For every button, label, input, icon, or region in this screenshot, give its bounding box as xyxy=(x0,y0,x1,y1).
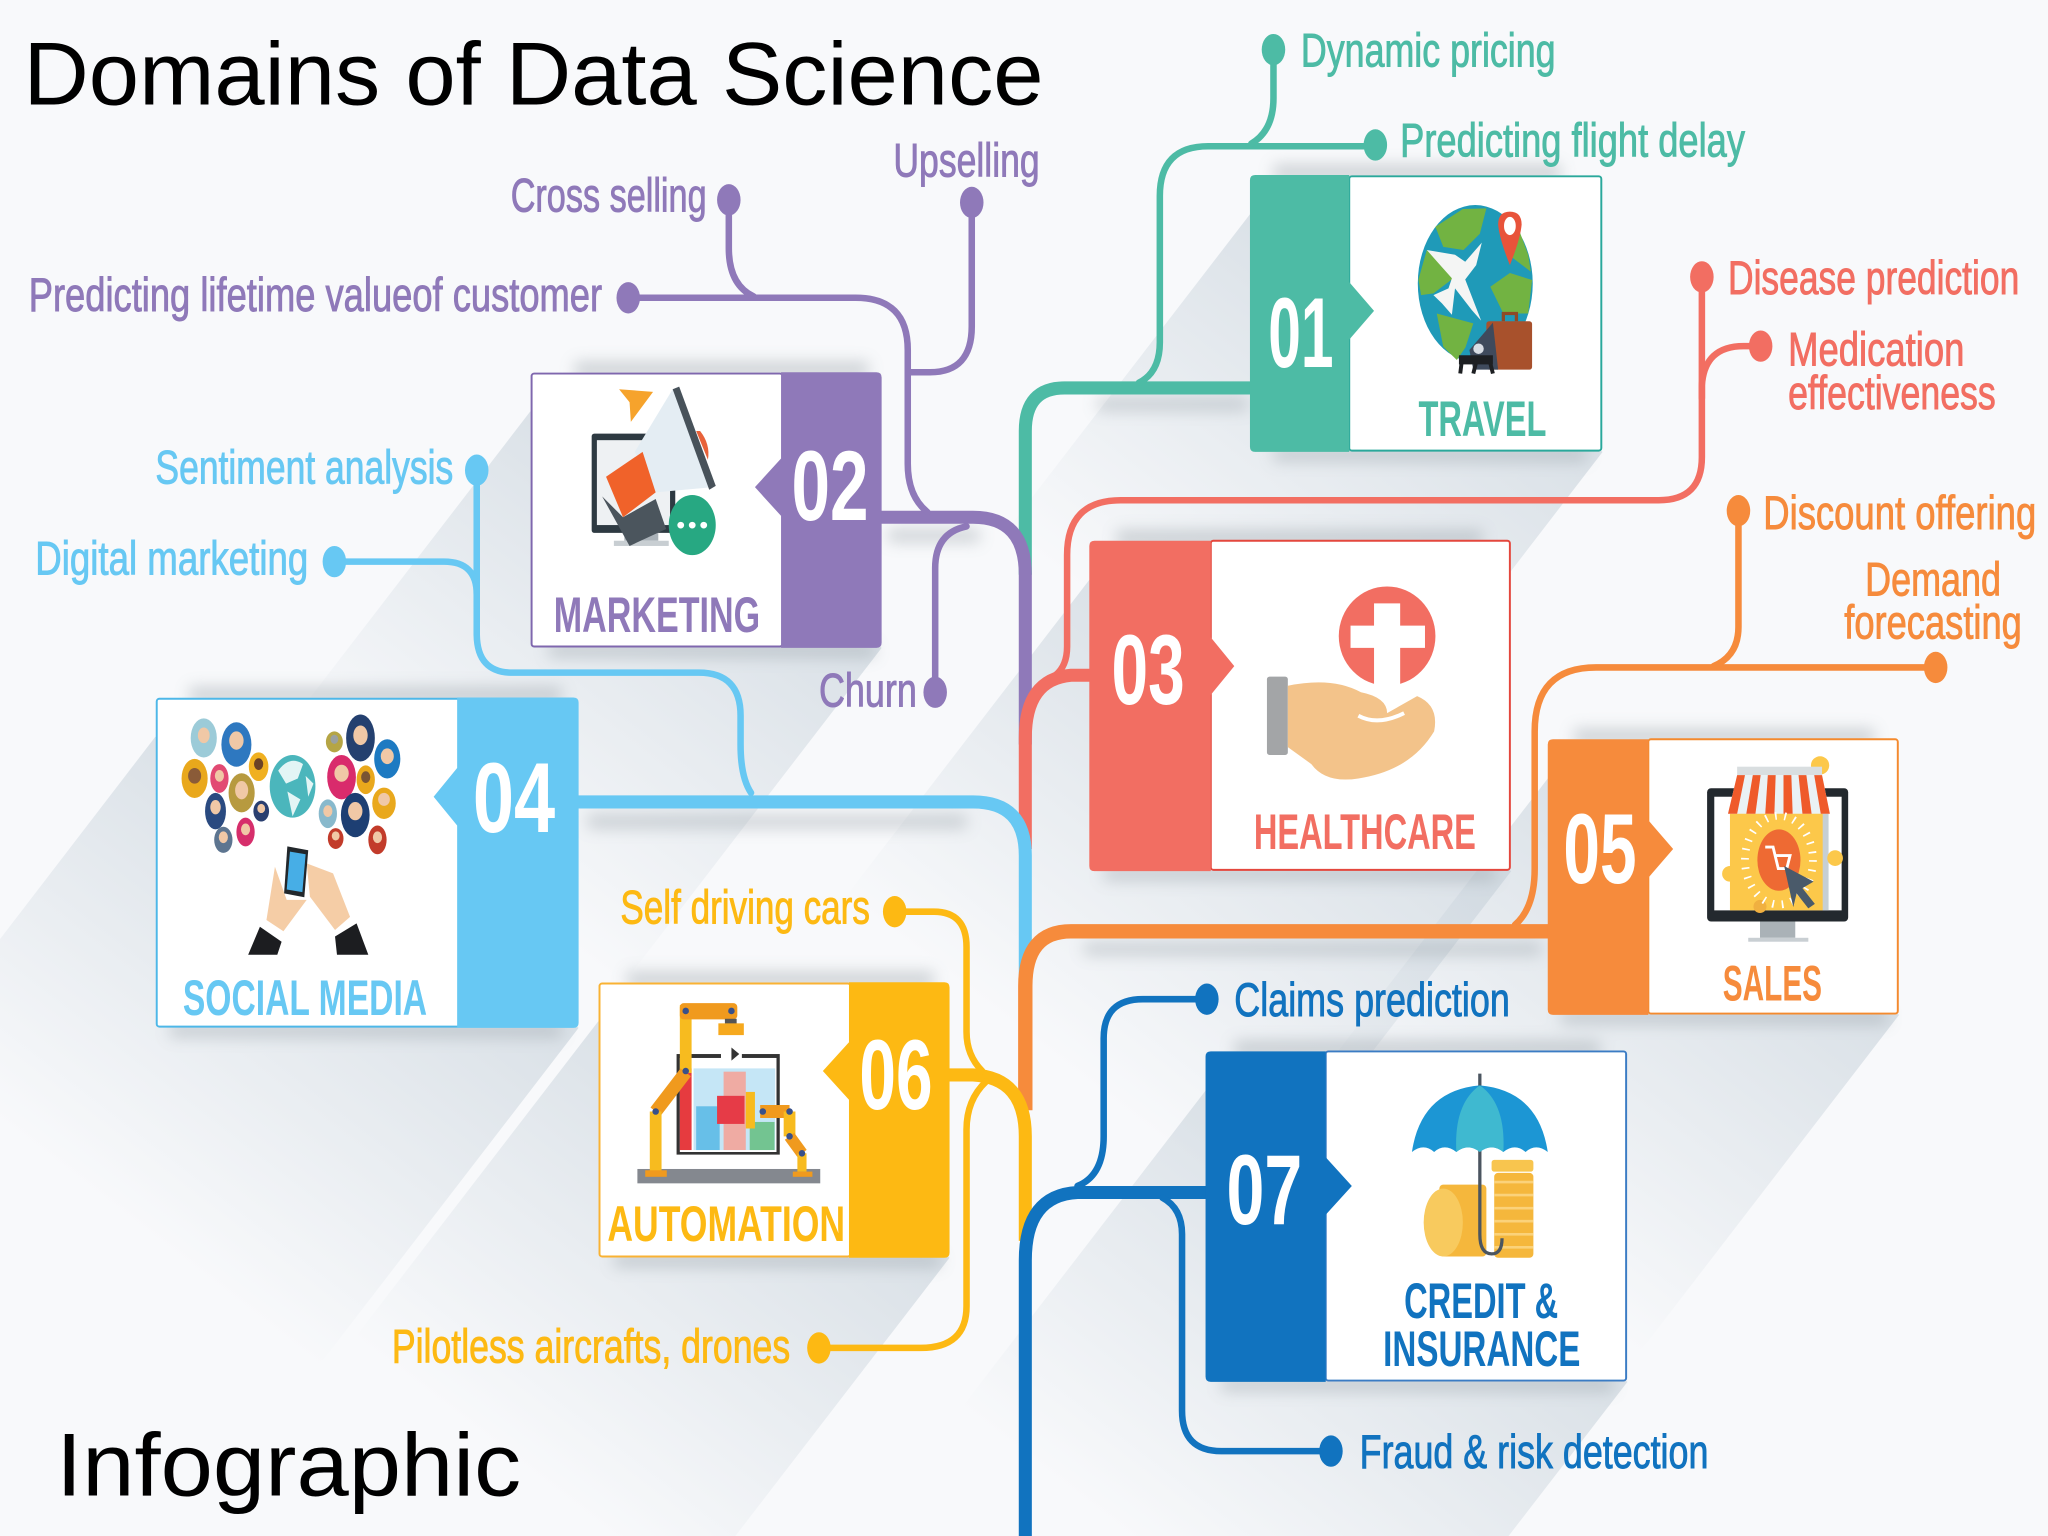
number 02: 02 xyxy=(792,431,869,542)
subtitle: Infographic: Infographic xyxy=(56,1416,521,1515)
panel: social media card xyxy=(157,697,579,1028)
number 04: 04 xyxy=(473,743,555,854)
panel: travel card xyxy=(1250,175,1601,452)
number 03: 03 xyxy=(1112,615,1185,726)
text: Claims prediction: Claims prediction xyxy=(1234,973,1510,1026)
text: Churn: Churn xyxy=(819,664,917,717)
text: Fraud and risk detection: Fraud & risk detection xyxy=(1360,1425,1708,1478)
number 05: 05 xyxy=(1563,794,1637,905)
text: Predicting flight delay: Predicting flight delay xyxy=(1400,114,1745,167)
label CREDIT & INSURANCE xyxy=(1383,1273,1580,1377)
connector: healthcare xyxy=(1025,261,1772,849)
long diagonal card shadows xyxy=(0,214,1899,1536)
connector: social media xyxy=(323,455,1025,1006)
text: Self driving cars: Self driving cars xyxy=(620,880,870,933)
label TRAVEL: TRAVEL xyxy=(1418,391,1546,447)
number 01: 01 xyxy=(1268,278,1334,389)
number 06: 06 xyxy=(859,1020,933,1131)
connector: sales xyxy=(1025,495,1947,1110)
text: Dynamic pricing: Dynamic pricing xyxy=(1301,24,1556,77)
text: Cross selling: Cross selling xyxy=(511,169,707,222)
icon: people network and phone xyxy=(182,714,400,955)
text: Medication effectiveness: Medication xyxy=(1788,323,1964,376)
label SALES: SALES xyxy=(1723,955,1822,1011)
icon: online shop monitor xyxy=(1707,756,1848,942)
icon: hand holding medical cross xyxy=(1267,586,1435,780)
icon: megaphone and monitor xyxy=(592,387,716,555)
text: Sentiment analysis: Sentiment analysis xyxy=(155,440,453,493)
icon: robot arms and laptop xyxy=(637,1003,820,1183)
soft top and bottom card glows xyxy=(170,165,1887,1391)
connector: credit and insurance xyxy=(1025,984,1343,1536)
connector: marketing xyxy=(616,184,1025,744)
icon: umbrella over coins xyxy=(1412,1074,1548,1258)
label CREDIT & INSURANCE: CREDIT & xyxy=(1404,1273,1558,1329)
title: Domains of Data Science xyxy=(24,24,1044,123)
text: Predicting lifetime value of customer: Predicting lifetime valueof customer xyxy=(29,268,602,321)
label HEALTHCARE: HEALTHCARE xyxy=(1254,804,1476,860)
text: Medication effectiveness xyxy=(1788,323,1996,419)
icon: megaphone and monitor: ••• xyxy=(677,512,708,538)
panel: marketing card xyxy=(532,372,882,648)
icon: globe with plane and luggage xyxy=(1418,205,1533,374)
number 07: 07 xyxy=(1226,1135,1302,1246)
connector: travel xyxy=(1025,34,1387,575)
label AUTOMATION: AUTOMATION xyxy=(607,1196,845,1252)
text: Demand forecasting: Demand xyxy=(1865,553,2001,606)
text: Demand forecasting xyxy=(1844,553,2022,649)
panel: credit and insurance card xyxy=(1206,1051,1626,1382)
text: Pilotless aircrafts, drones: Pilotless aircrafts, drones xyxy=(392,1319,790,1372)
panel: automation card xyxy=(600,982,950,1258)
text: Digital marketing: Digital marketing xyxy=(35,532,308,585)
panel: sales card xyxy=(1548,739,1898,1015)
text: Upselling: Upselling xyxy=(893,133,1040,186)
connector: automation xyxy=(807,896,1025,1364)
label CREDIT & INSURANCE: INSURANCE xyxy=(1383,1321,1580,1377)
panel: healthcare card xyxy=(1089,541,1510,871)
label MARKETING: MARKETING xyxy=(554,587,760,643)
label SOCIAL MEDIA: SOCIAL MEDIA xyxy=(183,970,427,1026)
